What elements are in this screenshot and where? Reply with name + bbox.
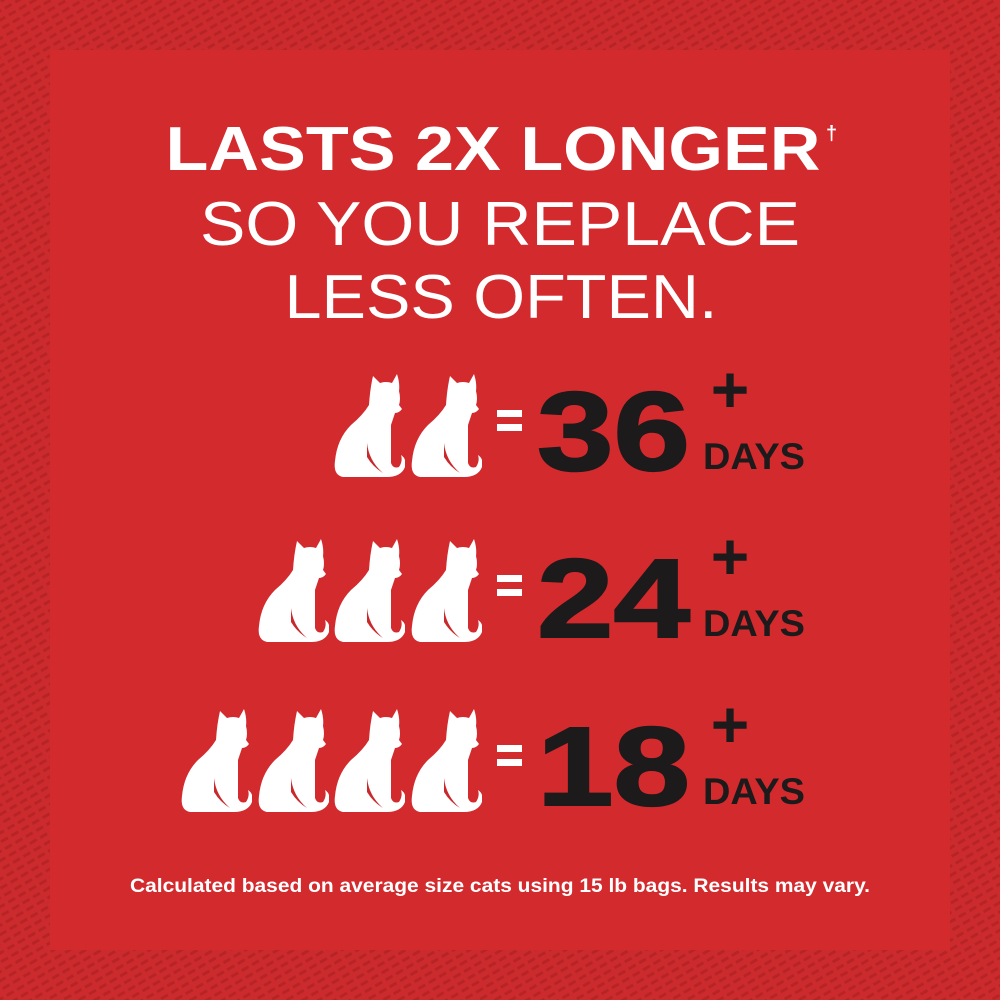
title: LESS OFTEN. xyxy=(284,263,718,332)
title: LASTS 2X LONGER xyxy=(166,115,820,184)
title xyxy=(166,115,837,332)
row: 3 cats = 24+ days: + xyxy=(711,519,749,593)
title: † xyxy=(826,123,837,145)
row: 2 cats = 36+ days: 36 xyxy=(537,369,690,494)
row: 2 cats = 36+ days xyxy=(335,352,805,494)
row: 4 cats = 18+ days xyxy=(182,687,805,829)
row: 3 cats = 24+ days: 24 xyxy=(537,536,690,661)
row: 3 cats = 24+ days xyxy=(259,519,805,661)
row: 2 cats = 36+ days: + xyxy=(711,352,749,426)
row: 4 cats = 18+ days: 18 xyxy=(537,704,690,829)
title: SO YOU REPLACE xyxy=(200,190,800,259)
row: 3 cats = 24+ days: DAYS xyxy=(703,603,805,644)
row: 4 cats = 18+ days: + xyxy=(711,687,749,761)
row: 4 cats = 18+ days: DAYS xyxy=(703,771,805,812)
footer note: Calculated based on average size cats using 15 lb bags. Results may vary. xyxy=(130,876,870,897)
row: 2 cats = 36+ days: DAYS xyxy=(703,436,805,477)
